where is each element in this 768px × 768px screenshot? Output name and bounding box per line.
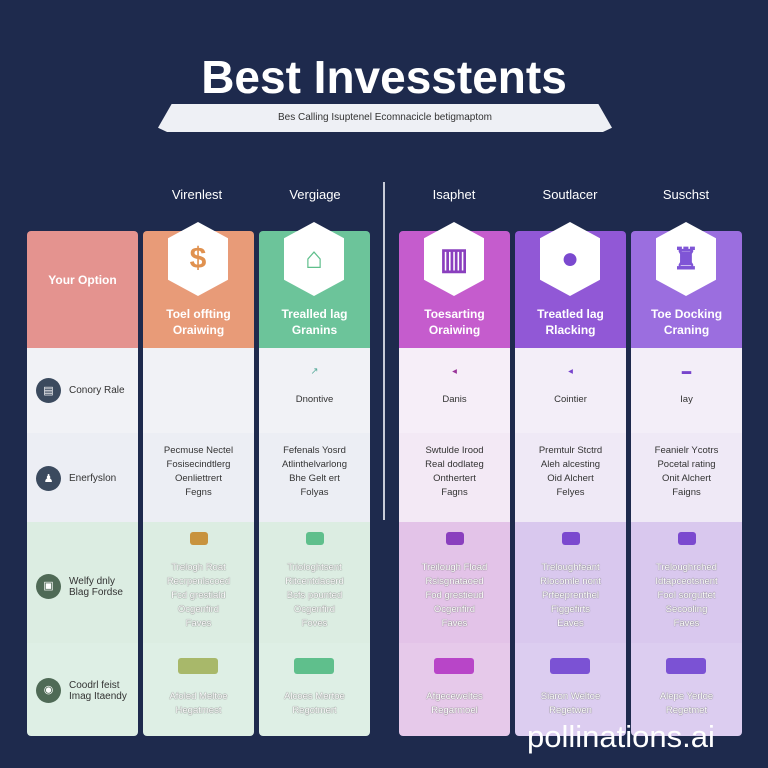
- row 3 texts: Fcd grestiald: [171, 590, 226, 601]
- row 3 texts: Idtapceotsnent: [655, 576, 718, 587]
- row labels: ▤: [43, 385, 54, 397]
- column header texts: Treatled lag: [537, 307, 604, 321]
- column header texts: [166, 307, 722, 337]
- column header texts: Oraiwing: [429, 323, 480, 337]
- column header texts: Toesarting: [424, 307, 485, 321]
- text: Blag Fordse: [69, 586, 123, 598]
- column headings: [172, 187, 710, 202]
- row 3 texts: Treloughrched: [656, 562, 717, 573]
- row 1 texts: ↗: [311, 366, 318, 377]
- row 3 badges: [190, 532, 696, 545]
- text: ◉: [44, 684, 53, 696]
- row 2 texts: Fagns: [441, 487, 468, 498]
- column headings: Virenlest: [172, 187, 222, 202]
- row 2 texts: Swtulde Irood: [425, 445, 484, 456]
- row 3 texts: Prfeeprenthel: [542, 590, 599, 601]
- row 3 texts: Fool sorguttet: [657, 590, 716, 601]
- row 2 texts: Feanielr Ycotrs: [655, 445, 718, 456]
- column headings: Vergiage: [289, 187, 341, 202]
- icon: hexagons: ●: [561, 242, 579, 275]
- column headings: Suschst: [663, 187, 709, 202]
- column header texts: Toe Docking: [651, 307, 722, 321]
- row 4 texts: Afoled Meltoe: [169, 691, 228, 702]
- row 2 texts: Aleh alcesting: [541, 459, 600, 470]
- row 3 texts: Eaves: [557, 618, 584, 629]
- row 1 texts: Iay: [680, 394, 693, 405]
- panel: column 1: [143, 231, 254, 736]
- row 2 texts: Bhe Gelt ert: [289, 473, 340, 484]
- panel: label column: Your Option: [48, 273, 117, 287]
- row 4 texts: Afgeceweltes: [426, 691, 483, 702]
- watermark: pollinations.ai: [527, 719, 715, 754]
- row 4 texts: Siaron Weltoe: [541, 691, 600, 702]
- divider line: [383, 182, 385, 520]
- row 4 texts: Regetwen: [549, 705, 592, 716]
- text: Imag Itaendy: [69, 690, 127, 702]
- row 3 texts: Faves: [186, 618, 211, 629]
- column header texts: Trealled lag: [281, 307, 348, 321]
- row 3 texts: Ocgenfird: [294, 604, 335, 615]
- row 2 texts: Fefenals Yosrd: [283, 445, 346, 456]
- column header texts: Toel offting: [166, 307, 231, 321]
- column header texts: Rlacking: [545, 323, 596, 337]
- row 1 texts: Dnontive: [296, 394, 333, 405]
- text: ▣: [43, 580, 54, 592]
- panel: column 2: [259, 231, 370, 736]
- column header texts: Granins: [292, 323, 337, 337]
- icon: hexagons: [168, 222, 716, 296]
- row 3 texts: Rsisgnataoed: [425, 576, 484, 587]
- row 4 texts: Alepe Yerloe: [660, 691, 713, 702]
- row 2 texts: Fegns: [185, 487, 212, 498]
- panel: column 4: [515, 231, 626, 736]
- icon: hexagons: ♜: [673, 242, 699, 276]
- row 2 texts: Premtulr Stctrd: [539, 445, 602, 456]
- column header texts: Oraiwing: [173, 323, 224, 337]
- row 1 texts: Cointier: [554, 394, 587, 405]
- icon: hexagons: $: [190, 242, 206, 275]
- row 2 texts: Oid Alchert: [547, 473, 594, 484]
- row 4 texts: Regotmert: [292, 705, 337, 716]
- row 2 texts: Onthertert: [433, 473, 476, 484]
- row 4 bars: [178, 658, 706, 674]
- row 3 texts: Bcfs pounted: [287, 590, 342, 601]
- text: Enerfyslon: [69, 473, 116, 484]
- row 2 texts: Felyes: [556, 487, 584, 498]
- panel: label column: [27, 231, 138, 736]
- row 2 texts: [164, 445, 718, 498]
- row labels: Conory Rale: [69, 385, 125, 396]
- panel: column 5: [631, 231, 742, 736]
- icon: hexagons: ▥: [440, 242, 468, 276]
- row 3 texts: Secooling: [666, 604, 707, 615]
- subtitle banner: [158, 104, 612, 132]
- row 2 texts: Fosisecindtlerg: [167, 459, 230, 470]
- row 3 texts: Fod grestieud: [425, 590, 484, 601]
- row 3 texts: Foves: [302, 618, 327, 629]
- text: ♟: [44, 473, 53, 485]
- row 1 texts: ▬: [682, 366, 691, 377]
- row 3 texts: Triologhtsent: [287, 562, 342, 573]
- row 2 texts: Faigns: [672, 487, 701, 498]
- row 3 texts: Ocgenfird: [434, 604, 475, 615]
- row 1 texts: [296, 366, 693, 405]
- row 2 texts: Atlinthelvarlong: [282, 459, 347, 470]
- row 3 texts: [166, 562, 718, 629]
- row 4 texts: [169, 691, 714, 716]
- subtitle banner: Bes Calling Isuptenel Ecomnacicle betigmaptom: [278, 112, 492, 123]
- row 3 texts: Recrpenlscoed: [167, 576, 230, 587]
- icon: hexagons: ⌂: [305, 242, 323, 275]
- row 3 texts: Trelogh Roat: [171, 562, 226, 573]
- row 3 texts: Treilough Fload: [422, 562, 487, 573]
- row 3 texts: Faves: [674, 618, 699, 629]
- row 1 texts: ◂: [568, 366, 573, 377]
- row labels: [36, 378, 125, 403]
- row 1 texts: Danis: [442, 394, 467, 405]
- row 3 texts: Figgefirts: [551, 604, 590, 615]
- row 4 texts: Alcoes Mertoe: [284, 691, 345, 702]
- row 3 texts: Ocgenfird: [178, 604, 219, 615]
- row 3 texts: Ritcentdacerd: [285, 576, 344, 587]
- row 2 texts: Oenliettrert: [175, 473, 222, 484]
- row 3 texts: Treloughfeant: [541, 562, 600, 573]
- panel: column 3: [399, 231, 510, 736]
- text: Coodrl feist: [69, 680, 120, 690]
- row 4 texts: Regetmet: [666, 705, 707, 716]
- row 2 texts: Pecmuse Nectel: [164, 445, 233, 456]
- text: Welfy dnly: [69, 576, 115, 586]
- row 2 texts: Pocetal rating: [657, 459, 716, 470]
- row 1 texts: ◂: [452, 366, 457, 377]
- row 2 texts: Real dodlateg: [425, 459, 484, 470]
- row 2 texts: Folyas: [300, 487, 328, 498]
- row 3 texts: Faves: [442, 618, 467, 629]
- row 4 texts: Hegatmest: [176, 705, 221, 716]
- column headings: Soutlacer: [543, 187, 597, 202]
- row 2 texts: Onit Alchert: [662, 473, 711, 484]
- row 3 texts: Rlocomle nont: [540, 576, 601, 587]
- column header texts: Craning: [664, 323, 709, 337]
- row 4 texts: Regarmoel: [431, 705, 478, 716]
- column headings: Isaphet: [433, 187, 475, 202]
- title: Best Invesstents: [201, 51, 567, 103]
